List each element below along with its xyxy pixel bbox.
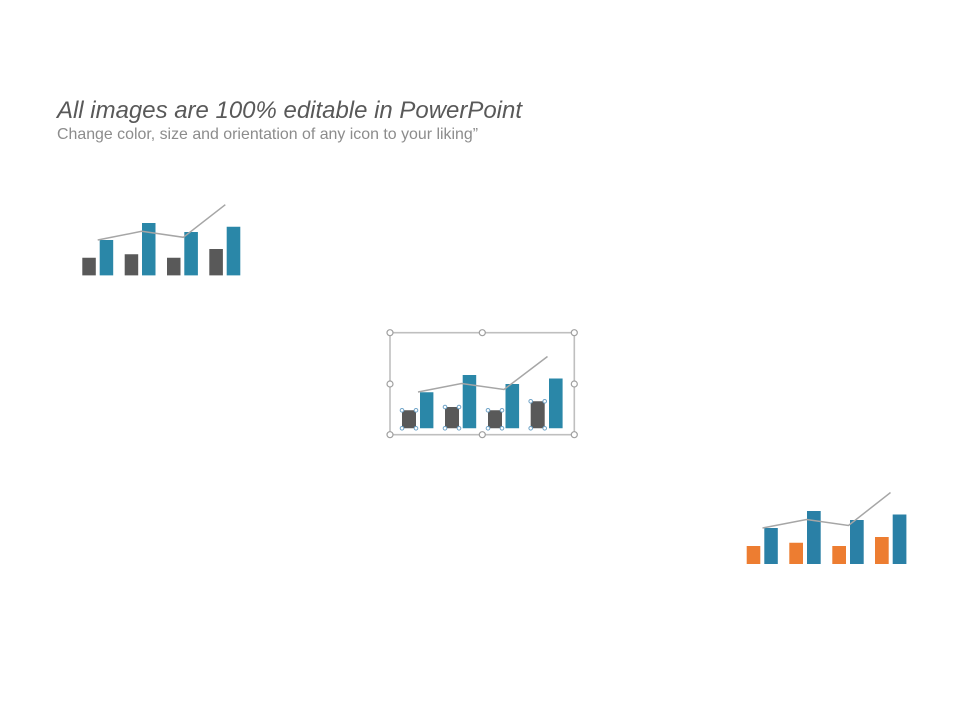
bar selection handles bbox=[400, 400, 546, 430]
selection box bbox=[387, 330, 577, 438]
subtitle: Change color, size and orientation of any icon to your liking” bbox=[57, 126, 478, 143]
icon: bar chart with dark gray bars, top left bbox=[82, 205, 240, 275]
heading block bbox=[55, 97, 523, 143]
dark gray bars bbox=[402, 401, 545, 428]
icon: bar chart in selected editing state, centre bbox=[387, 330, 577, 438]
blue bars bbox=[420, 375, 563, 428]
icon: bar chart with orange bars, bottom right bbox=[747, 492, 906, 564]
title: All images are 100% editable in PowerPoint bbox=[55, 97, 523, 124]
trend line bbox=[418, 356, 548, 392]
